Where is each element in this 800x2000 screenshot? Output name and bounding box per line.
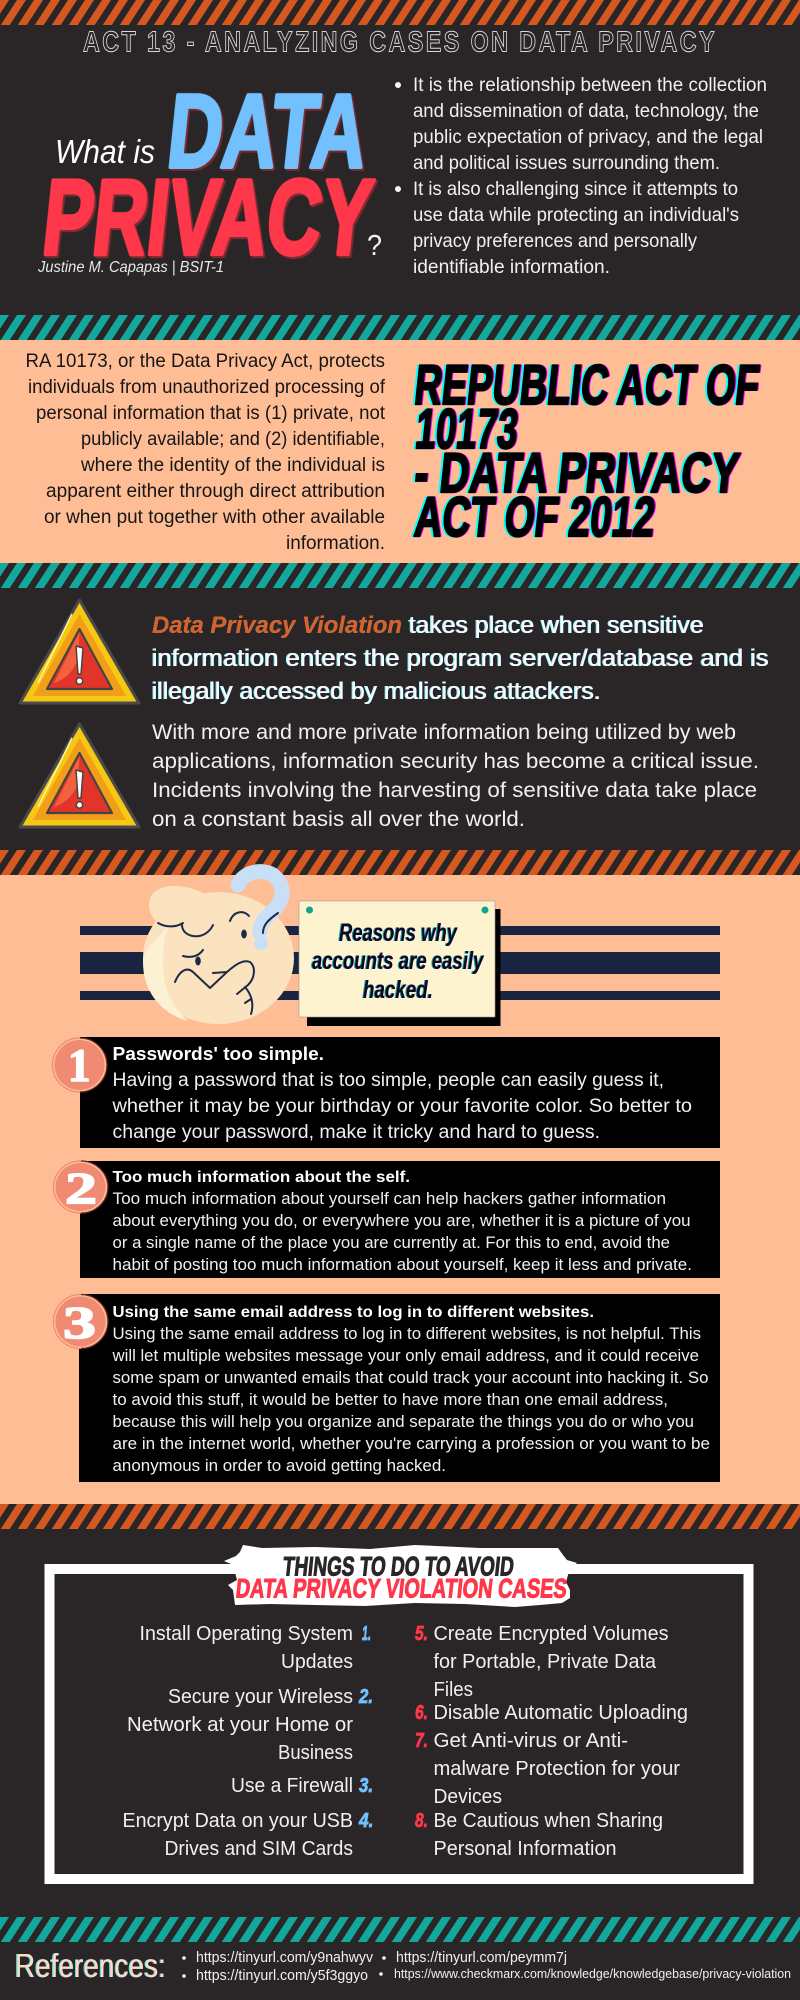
text: reason 1 body: change your password, make it tricky and hard to guess. (112, 1122, 600, 1143)
list: tips 1 to 4: Secure your Wireless (168, 1685, 353, 1708)
text block: RA 10173 description: or when put together with other available (44, 507, 385, 528)
text: author credit: Justine M. Capapas | BSIT-1 (37, 259, 224, 276)
list: tips 5 to 8: Personal Information (434, 1837, 616, 1860)
list: reference links: https://tinyurl.com/y9nahwyv (196, 1950, 374, 1966)
list: reference links: https://www.checkmarx.com/knowledge/knowledgebase/privacy-violation (394, 1966, 791, 1981)
text: reason 3 body: Using the same email address to log in to different websites, is not helpful. This (112, 1325, 701, 1343)
text: what is: What is (55, 133, 155, 170)
list: tips 1 to 4: Drives and SIM Cards (164, 1837, 353, 1860)
list: reference links (182, 1950, 791, 1984)
heading: republic act: ACT OF 2012 (412, 485, 658, 548)
stripe band: orange 3 (0, 1504, 800, 1529)
list: reference links: https://tinyurl.com/y5f3ggyo (196, 1968, 368, 1984)
text block: information security: on a constant basis all over the world. (152, 807, 525, 831)
list: tips 5 to 8: Devices (434, 1785, 502, 1808)
text block: RA 10173 description: personal information that is (1) private, not (36, 403, 386, 424)
list: tips 5 to 8: Disable Automatic Uploading (434, 1701, 688, 1724)
list: tips 5 to 8: 7. (415, 1729, 428, 1752)
decoration: navy bars (80, 926, 720, 1000)
stripe band: top orange (0, 0, 800, 25)
text block: information security (152, 720, 759, 831)
panel: reasons background (0, 875, 800, 1504)
text block: definition bullets (395, 75, 767, 278)
text: reason 3 body: some spam or unwanted emails that could track your account into hacking it. So (112, 1369, 708, 1387)
text: reason 3 body: because this will help you organize and separate the things you do or who you (112, 1413, 694, 1431)
text: reason 3 body: will let multiple websites message your only email address, and it could receive (111, 1347, 699, 1365)
list: tips 5 to 8: 8. (415, 1809, 428, 1832)
list: tips 5 to 8: Files (434, 1678, 473, 1701)
list: tips 5 to 8 (415, 1622, 688, 1860)
panel: reason 3 (54, 1294, 720, 1482)
list: tips 1 to 4: Updates (281, 1650, 353, 1673)
text block: definition bullets: It is also challenging since it attempts to (413, 179, 738, 200)
list: tips 1 to 4: 2. (358, 1685, 373, 1708)
text: reason 2 body: or a single name of the place you are currently at. For this to end, avoid the (112, 1234, 670, 1252)
text: reason 1 title: Passwords' too simple. (112, 1044, 324, 1064)
list: tips 5 to 8: Get Anti-virus or Anti- (434, 1729, 628, 1752)
list: tips 1 to 4: 1. (362, 1622, 371, 1645)
text block: definition bullets: and dissemination of data, technology, the (413, 101, 759, 122)
icon: number badge 2: 2 (65, 1164, 97, 1213)
stripe band: teal 1 (0, 315, 800, 340)
heading: things to do (224, 1545, 577, 1607)
list: tips 5 to 8: Be Cautious when Sharing (434, 1809, 663, 1832)
icon: number badge 3 (54, 1294, 108, 1348)
stripe band: teal 2 (0, 563, 800, 588)
list: tips 5 to 8: 5. (415, 1622, 428, 1645)
text: reason 3 title: Using the same email address to log in to different websites. (112, 1304, 594, 1321)
list: tips 1 to 4: Business (278, 1741, 353, 1764)
text block: RA 10173 description: RA 10173, or the Data Privacy Act, protects (26, 351, 385, 372)
icon: number badge 1: 1 (68, 1040, 90, 1092)
icon: number badge 1 (52, 1038, 107, 1092)
text: violation sentence: illegally accessed by malicious attackers. (152, 678, 601, 705)
panel: republic act background (0, 340, 800, 563)
text: reason 3 body: are in the internet world, whether you're carrying a profession or you want to be (112, 1435, 710, 1453)
text block: definition bullets: and political issues surrounding them. (413, 153, 720, 174)
list: tips 5 to 8: Create Encrypted Volumes (434, 1622, 668, 1645)
panel: reason 2 (54, 1161, 720, 1278)
text block: definition bullets: It is the relationship between the collection (413, 75, 767, 96)
list: tips 1 to 4: Encrypt Data on your USB (122, 1809, 353, 1832)
heading: references: References: (15, 1947, 166, 1984)
text block: information security: With more and more private information being utilized by web (152, 720, 736, 744)
list: reference links: https://tinyurl.com/peymm7j (396, 1950, 567, 1966)
text block: RA 10173 description: apparent either through direct attribution (46, 481, 385, 502)
heading: what is data privacy (38, 74, 382, 277)
stripe band: teal 3 (0, 1917, 800, 1942)
icon: number badge 3: 3 (63, 1298, 96, 1348)
list: tips 1 to 4: 4. (358, 1809, 374, 1832)
text block: definition bullets: privacy preferences and personally (413, 231, 697, 252)
text block: information security: Incidents involving the harvesting of sensitive data take place (152, 778, 757, 802)
list: tips 5 to 8: malware Protection for your (434, 1757, 680, 1780)
text block: violation definition (152, 612, 769, 705)
text: data: DATA (163, 74, 373, 190)
text: reason 3 body: anonymous in order to avoid getting hacked. (112, 1457, 446, 1475)
list: tips 5 to 8: 6. (415, 1701, 428, 1724)
text block: RA 10173 description: publicly available; and (2) identifiable, (81, 429, 385, 450)
text: reason 2 body: habit of posting too much information about yourself, keep it less and private. (112, 1256, 692, 1274)
text: reason 1 body: Having a password that is too simple, people can easily guess it, (112, 1070, 664, 1091)
heading: republic act: 10173 (413, 397, 521, 460)
icon: warning triangle 1 (20, 600, 139, 703)
list: tips 1 to 4 (122, 1622, 374, 1860)
callout: sticky note: accounts are easily (312, 947, 484, 975)
icon: thinking face (143, 886, 294, 1024)
icon: warning triangle 2 (20, 724, 139, 827)
stripe band: orange 2 (0, 850, 800, 875)
text: reason 3 body: to avoid this stuff, it would be better to have more than one email address, (112, 1391, 668, 1409)
text: reason 2 body (112, 1190, 692, 1274)
callout: sticky note: hacked. (363, 976, 433, 1004)
text: reason 2 body: about everything you do, or everywhere you are, whether it is a picture of you (112, 1212, 690, 1230)
panel: reason 1 (52, 1037, 720, 1148)
list: tips 1 to 4: Use a Firewall (231, 1774, 353, 1797)
text block: definition bullets: public expectation of privacy, and the legal (413, 127, 763, 148)
text block: RA 10173 description (26, 351, 386, 554)
list: tips 1 to 4: Install Operating System (140, 1622, 353, 1645)
panel: white frame (50, 1569, 748, 1879)
text block: RA 10173 description: information. (286, 533, 385, 554)
text: violation term: Data Privacy Violation (152, 612, 402, 639)
text block: definition bullets: identifiable information. (413, 257, 610, 278)
list: tips 1 to 4: 3. (359, 1774, 373, 1797)
text block: information security: applications, information security has become a critical issue. (152, 749, 759, 773)
text block: RA 10173 description: where the identity of the individual is (80, 455, 385, 476)
text: privacy: PRIVACY (38, 157, 378, 277)
text: question mark: ? (367, 230, 382, 262)
text: reason 1 body (111, 1070, 692, 1143)
text: violation sentence (152, 612, 769, 705)
text: things to do to avoid: THINGS TO DO TO AVOID (281, 1551, 516, 1581)
text: reason 2 body: Too much information about yourself can help hackers gather information (112, 1190, 666, 1208)
text: violation sentence: information enters the program server/database and is (152, 645, 769, 672)
list: tips 5 to 8: for Portable, Private Data (434, 1650, 657, 1673)
text: data privacy violation cases: DATA PRIVACY VIOLATION CASES (234, 1573, 569, 1603)
list: tips 1 to 4: Network at your Home or (127, 1713, 353, 1736)
text: reason 2 title: Too much information about the self. (112, 1169, 410, 1186)
callout: sticky note (299, 901, 500, 1026)
text block: RA 10173 description: individuals from unauthorized processing of (28, 377, 386, 398)
text: reason 3 body (111, 1325, 710, 1475)
text: reason 1 body: whether it may be your birthday or your favorite color. So better to (111, 1096, 692, 1117)
icon: question mark (238, 872, 282, 950)
text block: definition bullets: use data while protecting an individual's (413, 205, 739, 226)
callout: sticky note: Reasons why (339, 919, 458, 947)
heading: republic act (412, 353, 762, 548)
icon: number badge 2 (54, 1161, 108, 1213)
decoration: white brush (224, 1545, 577, 1607)
text: violation sentence: takes place when sensitive (409, 612, 704, 639)
